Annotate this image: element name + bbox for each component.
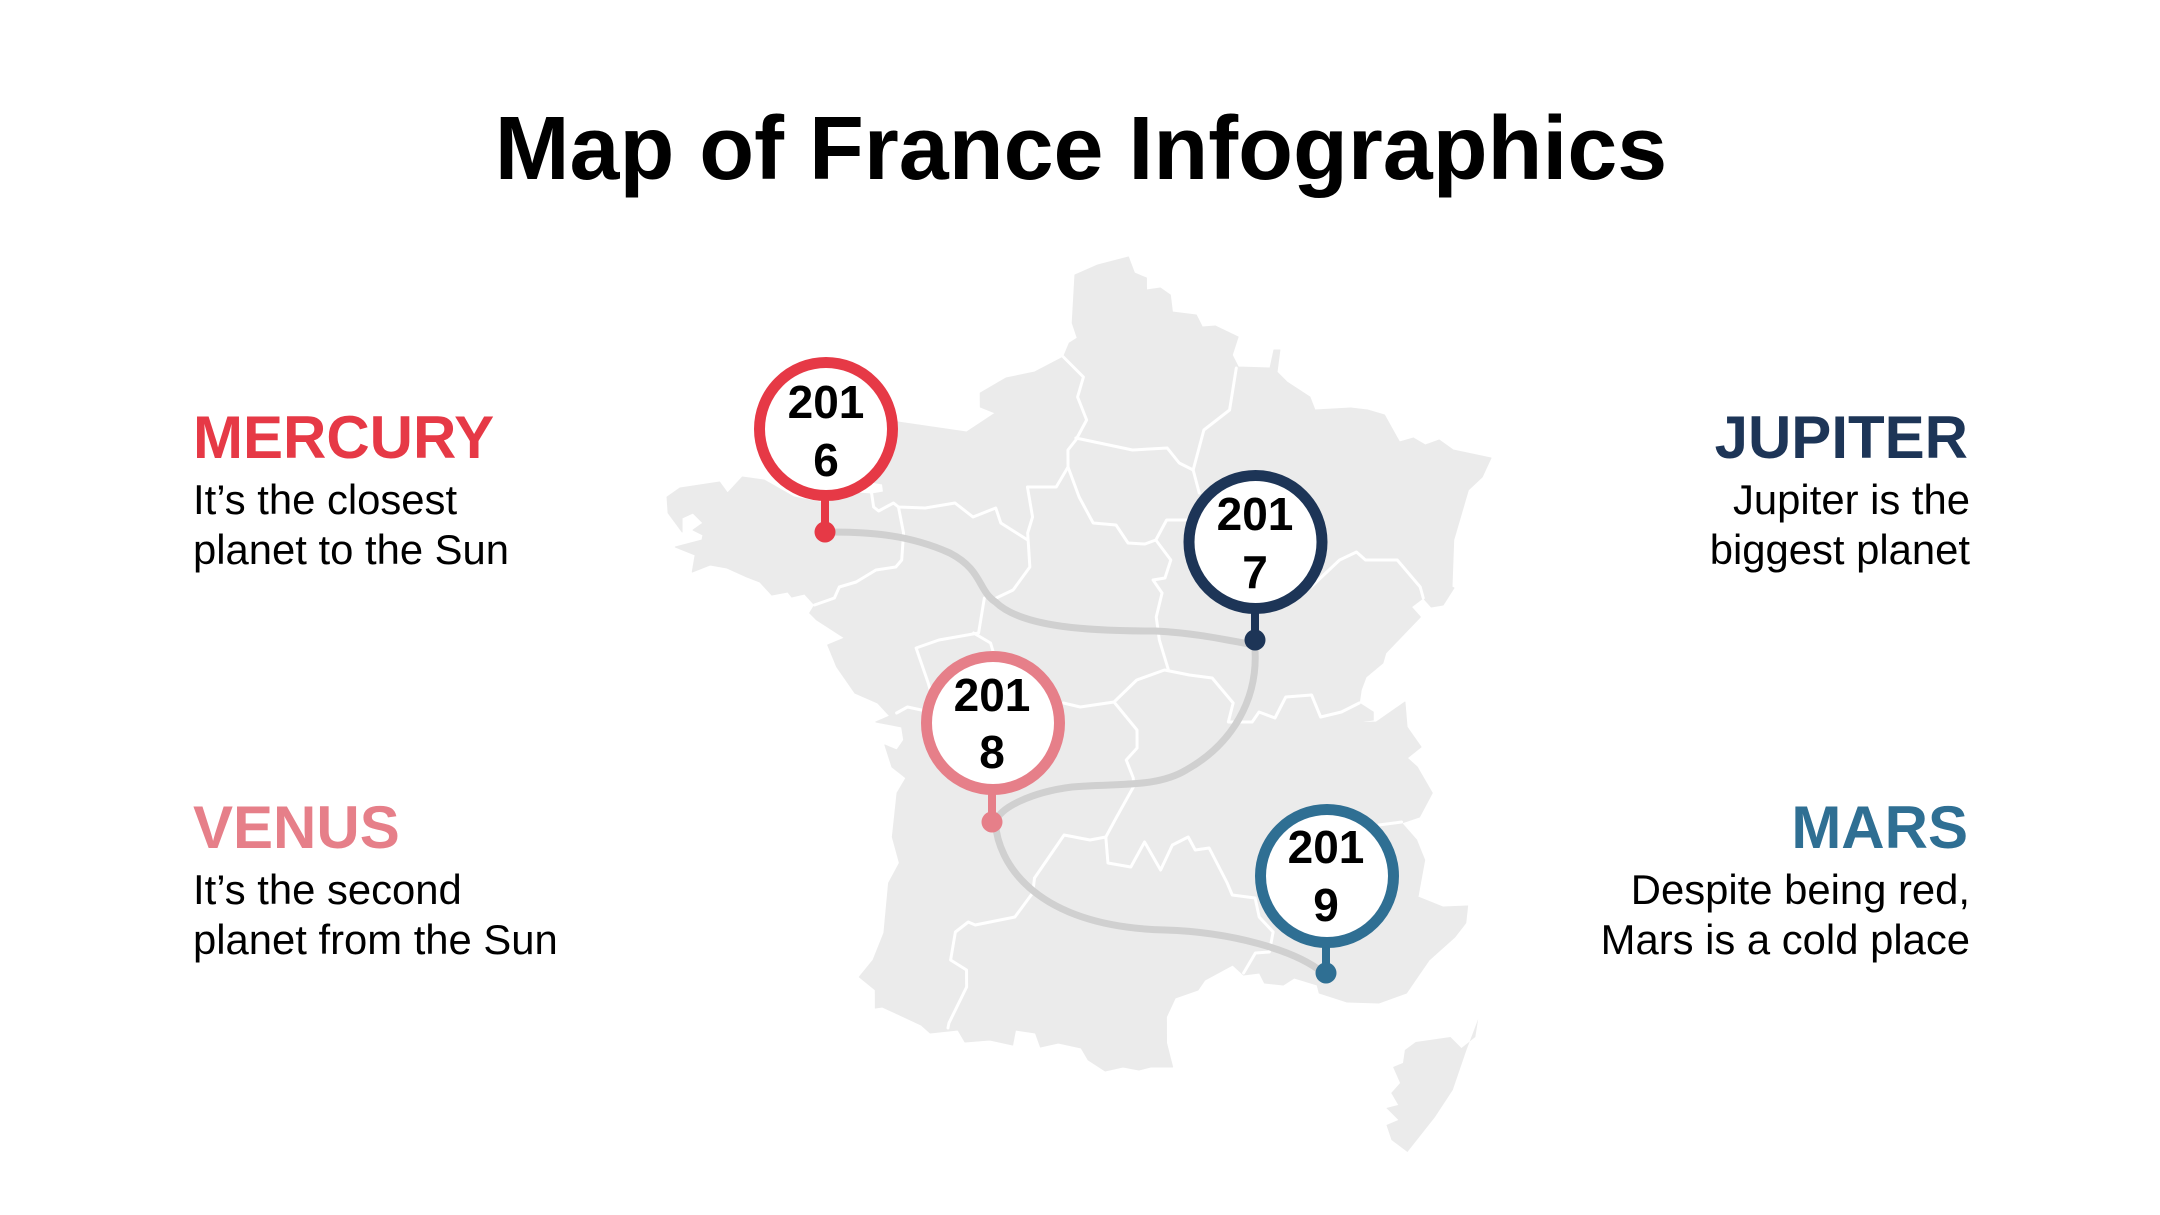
pin: 2018: 201 xyxy=(954,669,1030,721)
text block: Venus: planet from the Sun xyxy=(193,916,558,963)
text block: Venus: It’s the second xyxy=(193,866,462,913)
pin: 2016: 6 xyxy=(813,434,839,486)
pin: 2018: 8 xyxy=(979,726,1005,778)
text block: Mars: Despite being red, xyxy=(1631,866,1970,913)
pin: 2017: 201 xyxy=(1217,488,1293,540)
pin: 2018 xyxy=(926,656,1060,832)
title: Map of France Infographics xyxy=(495,99,1667,199)
pin: 2019: 9 xyxy=(1313,879,1339,931)
pin: 2016 xyxy=(760,362,892,542)
text block: Mercury: planet to the Sun xyxy=(193,526,509,573)
text block: Mars: MARS xyxy=(1791,794,1968,861)
text block: Jupiter: JUPITER xyxy=(1715,404,1968,471)
text block: Mercury xyxy=(193,404,509,573)
text block: Mars: Mars is a cold place xyxy=(1601,916,1970,963)
Corsica xyxy=(1386,1019,1479,1152)
map of France xyxy=(666,257,1495,1152)
route line connecting the pins xyxy=(825,532,1323,973)
mainland France silhouette xyxy=(666,257,1494,1071)
text block: Venus xyxy=(193,794,558,963)
text block: Mercury: It’s the closest xyxy=(193,476,457,523)
pin: 2019: 201 xyxy=(1288,821,1364,873)
text block: Jupiter: Jupiter is the xyxy=(1733,476,1970,523)
pin: 2019 xyxy=(1260,810,1394,984)
pin: 2017: 7 xyxy=(1242,546,1268,598)
text block: Jupiter: biggest planet xyxy=(1710,526,1970,573)
text block: Jupiter xyxy=(1710,404,1970,573)
pin: 2016: 201 xyxy=(788,376,864,428)
text block: Mercury: MERCURY xyxy=(193,404,494,471)
white region borders xyxy=(813,357,1426,1028)
text block: Venus: VENUS xyxy=(193,794,400,861)
pin: 2017 xyxy=(1189,476,1322,650)
text block: Mars xyxy=(1601,794,1970,963)
